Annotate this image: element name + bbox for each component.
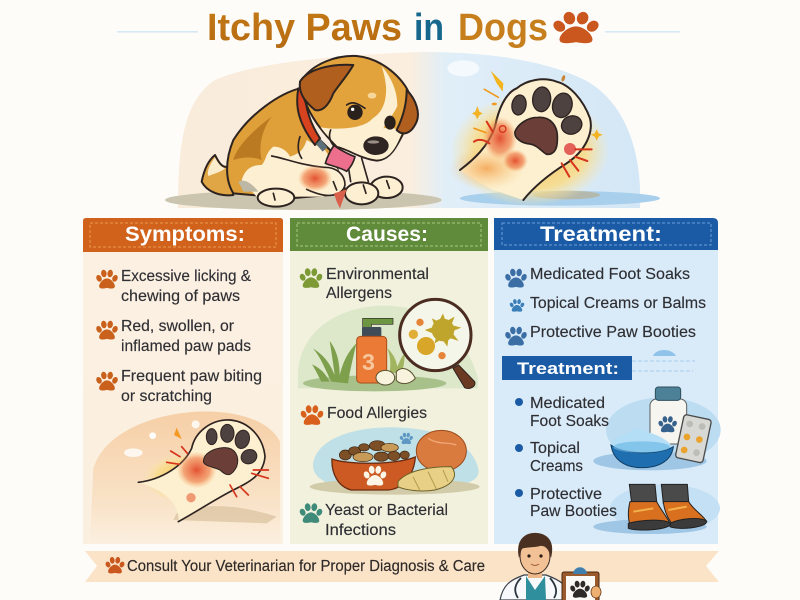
title: Itchy Paws in Dogs: Dogs [458, 7, 548, 49]
cause: food allergies: Food Allergies [327, 405, 427, 422]
cause: yeast or bacterial infections [299, 502, 448, 539]
panel: causes [290, 218, 488, 544]
cause: yeast or bacterial infections: Yeast or Bacterial [325, 502, 448, 519]
bullet: topical creams: Creams [530, 458, 583, 475]
symptom: excessive licking [95, 268, 251, 305]
symptom: frequent biting: or scratching [121, 388, 212, 405]
symptom: red swollen pads: Red, swollen, or [121, 318, 235, 335]
illustration: irritated paw close-up [447, 60, 660, 207]
heading: Treatment: Treatment: [540, 223, 662, 246]
banner: consult your veterinarian: Consult Your Veterinarian for Proper Diagnosis & Care [127, 558, 485, 575]
symptom: frequent biting: Frequent paw biting [121, 368, 262, 385]
symptom: red swollen pads: inflamed paw pads [121, 338, 251, 355]
symptom: red swollen pads [95, 318, 251, 355]
title: Itchy Paws in Dogs: Itchy Paws [207, 7, 402, 49]
illustration: dog licking paw [165, 56, 442, 210]
treatment: medicated foot soaks [504, 266, 690, 288]
treatment: protective paw booties [504, 324, 696, 346]
bullet: protective paw booties [515, 486, 617, 520]
bullet: medicated foot soaks [515, 395, 609, 430]
heading: Causes: Causes: [346, 223, 428, 246]
cause: environmental allergens [299, 266, 429, 302]
subheading: Treatment [502, 350, 695, 380]
illustration: sore paw [90, 412, 280, 543]
bullet: medicated foot soaks: Medicated [530, 395, 605, 412]
cause: environmental allergens: Environmental [326, 266, 429, 283]
cause: food allergies [300, 405, 427, 425]
illustration: veterinarian with clipboard [500, 533, 601, 600]
banner: consult your veterinarian [85, 551, 719, 582]
hero illustration background [178, 52, 640, 208]
treatment: medicated foot soaks: Medicated Foot Soaks [530, 266, 690, 283]
heading: Symptoms [83, 218, 283, 252]
bullet: topical creams [515, 440, 583, 475]
title: Itchy Paws in Dogs: in [414, 7, 444, 49]
illustration: food bowl [310, 427, 480, 495]
illustration: soak bowl, bottle and pills [593, 387, 721, 470]
heading: Symptoms: Symptoms: [125, 223, 245, 246]
panel: symptoms [83, 218, 283, 544]
panel: treatment [494, 218, 721, 544]
symptom: excessive licking: chewing of paws [121, 288, 240, 305]
symptom: excessive licking: Excessive licking & [121, 268, 251, 285]
treatment: protective paw booties: Protective Paw Booties [530, 324, 696, 341]
title: Itchy Paws in Dogs [117, 7, 680, 49]
treatment: topical creams or balms: Topical Creams or Balms [530, 295, 706, 312]
cause: yeast or bacterial infections: Infections [325, 522, 396, 539]
symptom: frequent biting [95, 368, 262, 405]
illustration: protective booties [593, 484, 720, 534]
bullet: protective paw booties: Paw Booties [530, 503, 617, 520]
bullet: medicated foot soaks: Foot Soaks [530, 413, 609, 430]
subheading: Treatment: Treatment: [517, 359, 619, 378]
cause: environmental allergens: Allergens [326, 285, 392, 302]
bullet: protective paw booties: Protective [530, 486, 602, 503]
bullet: topical creams: Topical [530, 440, 580, 457]
heading: Causes [290, 218, 488, 251]
illustration: bottle, grass and magnifier with pollen: 3 [362, 349, 375, 375]
heading: Treatment [494, 218, 718, 250]
illustration: bottle, grass and magnifier with pollen [298, 299, 478, 391]
